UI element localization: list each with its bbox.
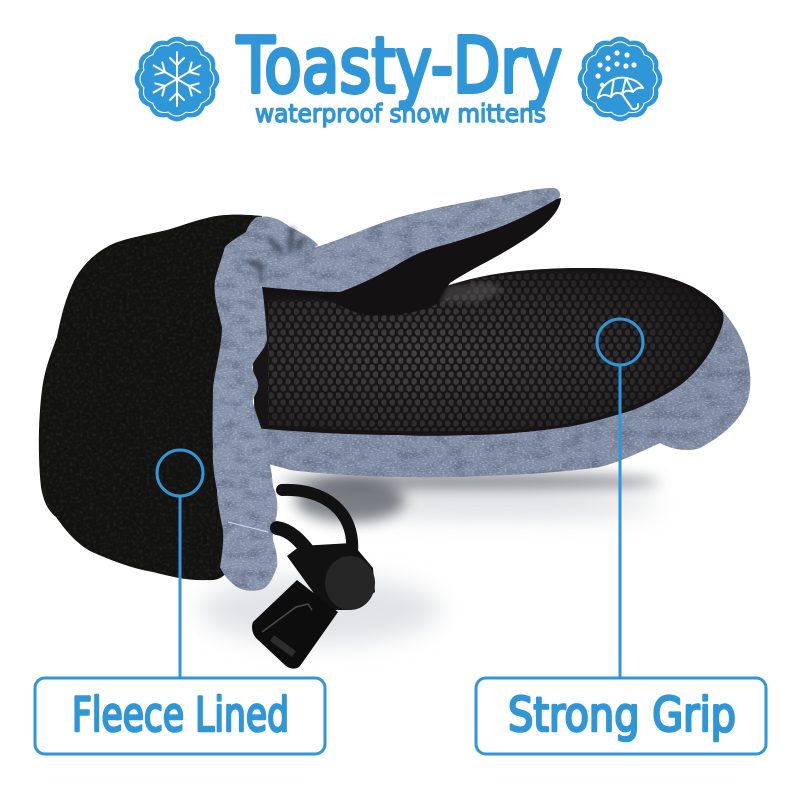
cuff folds (250, 230, 302, 282)
header (135, 22, 662, 128)
marker ring (597, 319, 643, 365)
icon: umbrella and rain badge (578, 37, 662, 121)
label text: Strong Grip (508, 688, 736, 743)
label box (35, 678, 325, 754)
thumb crease highlight (440, 282, 505, 302)
cord (277, 490, 352, 556)
leader line (618, 365, 622, 678)
cuff seam (228, 522, 268, 532)
drawstring cuff (213, 216, 318, 591)
drawstring toggles (252, 490, 375, 669)
cord end tab (252, 580, 338, 669)
mitten photo (39, 188, 750, 591)
leader line (178, 496, 182, 678)
label box (476, 678, 766, 754)
fleece lining (39, 215, 262, 580)
icon: snowflake badge (135, 37, 219, 121)
hex grip texture (268, 272, 719, 431)
subtitle: waterproof snow mittens (255, 99, 546, 128)
title: Toasty-Dry (236, 22, 562, 111)
thumb fabric (262, 188, 560, 292)
marker ring (157, 450, 203, 496)
cord lock barrel (287, 543, 375, 610)
ground shadow (200, 473, 660, 644)
thumb underside (262, 198, 561, 315)
grip palm (250, 268, 723, 436)
callout: strong grip (476, 319, 766, 754)
callout: fleece lined (35, 450, 325, 754)
grip shading (250, 268, 723, 436)
label text: Fleece Lined (72, 688, 289, 743)
lower body fabric (250, 300, 750, 477)
